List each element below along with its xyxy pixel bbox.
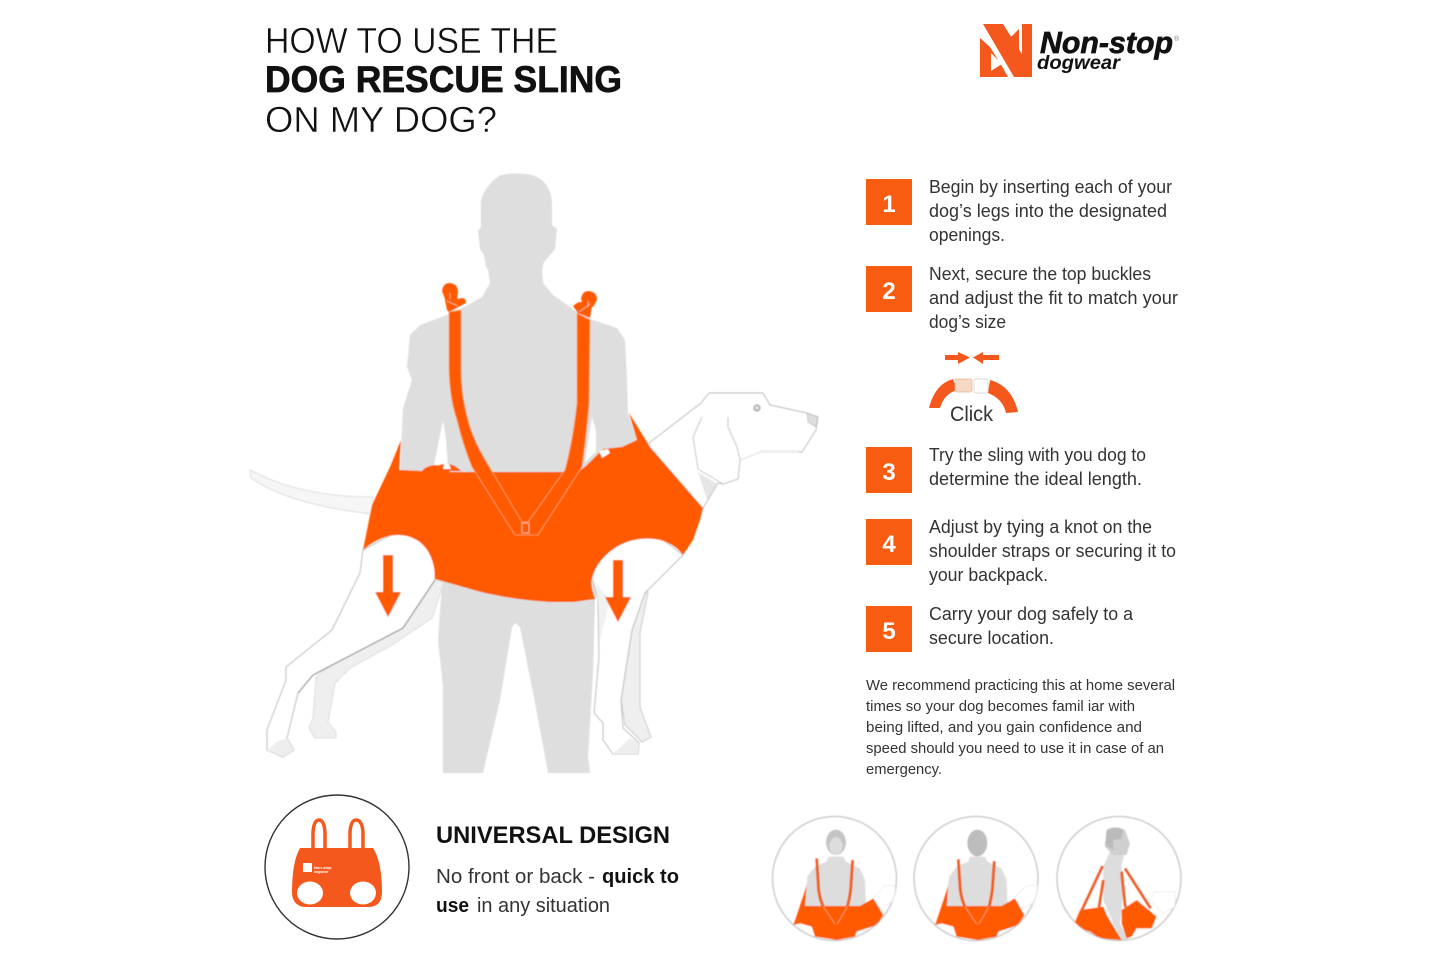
view: back [914, 816, 1038, 940]
icon: universal design sling in circle: dogwear [314, 870, 329, 874]
arrow: rear leg down [375, 555, 401, 617]
step 2: and adjust the fit to match your [929, 288, 1178, 308]
logo: Non-stop dogwear [980, 24, 1180, 77]
logo: Non-stop dogwear: Non-stop [1040, 25, 1173, 60]
step 2: Next, secure the top buckles [929, 264, 1151, 284]
step 4: Adjust by tying a knot on the [929, 517, 1152, 537]
strap buckle right [573, 291, 597, 318]
step 4 [866, 517, 1176, 585]
step 4: shoulder straps or securing it to [929, 541, 1176, 561]
step 1: openings. [929, 225, 1005, 245]
recommendation note: being lifted, and you gain confidence and [866, 719, 1142, 736]
logo: Non-stop dogwear: dogwear [1037, 53, 1122, 74]
title: HOW TO USE THE [265, 20, 558, 61]
universal design text: in any situation [477, 895, 610, 917]
title: DOG RESCUE SLING [265, 59, 622, 100]
view: front [772, 816, 896, 940]
dog far front leg [621, 592, 651, 742]
icon: universal design sling in circle: Non-stop [314, 865, 332, 870]
strap buckle left [442, 283, 466, 312]
step 3: determine the ideal length. [929, 469, 1142, 489]
step 3: Try the sling with you dog to [929, 445, 1146, 465]
view: side [1057, 816, 1181, 940]
step 2 [866, 264, 1178, 332]
person silhouette [400, 174, 640, 773]
step 4: your backpack. [929, 565, 1048, 585]
dog near front leg [592, 530, 683, 754]
step 3: 3 [882, 459, 896, 486]
main illustration: man carrying dog in sling [250, 174, 818, 773]
arrow: front leg down [605, 560, 631, 622]
dog tail [250, 470, 373, 514]
recommendation note: times so your dog becomes famil iar with [866, 698, 1135, 715]
recommendation note: We recommend practicing this at home several [866, 677, 1175, 694]
recommendation note: speed should you need to use it in case of an [866, 740, 1164, 757]
step 5: Carry your dog safely to a [929, 604, 1134, 624]
strap junction [522, 523, 529, 533]
recommendation note [866, 677, 1175, 778]
step 5: 5 [882, 618, 896, 645]
step 2: dog’s size [929, 312, 1006, 332]
icon: universal design sling in circle [265, 795, 409, 939]
dog far rear leg [309, 580, 444, 738]
step 5: secure location. [929, 628, 1054, 648]
step 1: Begin by inserting each of your [929, 177, 1172, 197]
universal design text: No front or back - [436, 866, 595, 888]
title: ON MY DOG? [265, 99, 497, 140]
step 3 [866, 445, 1146, 493]
universal design text [436, 866, 679, 917]
recommendation note: emergency. [866, 761, 942, 778]
dog head and neck [640, 393, 818, 510]
step 1 [866, 177, 1172, 245]
step 2: 2 [882, 278, 896, 305]
title [265, 20, 622, 140]
step 1: dog’s legs into the designated [929, 201, 1167, 221]
step 5 [866, 604, 1134, 652]
arm gaps [433, 420, 448, 470]
sling body [363, 413, 703, 602]
buckle click icon: Click [950, 403, 993, 426]
dog near rear leg [267, 530, 435, 757]
universal design heading: UNIVERSAL DESIGN [436, 822, 670, 849]
sling handles [432, 464, 461, 471]
universal design text: use [436, 895, 469, 917]
buckle click icon [929, 352, 1018, 426]
step 4: 4 [882, 531, 896, 558]
universal design text: quick to [602, 866, 679, 888]
shoulder straps [449, 310, 590, 535]
logo: Non-stop dogwear: ® [1174, 35, 1180, 43]
step 1: 1 [882, 191, 896, 218]
